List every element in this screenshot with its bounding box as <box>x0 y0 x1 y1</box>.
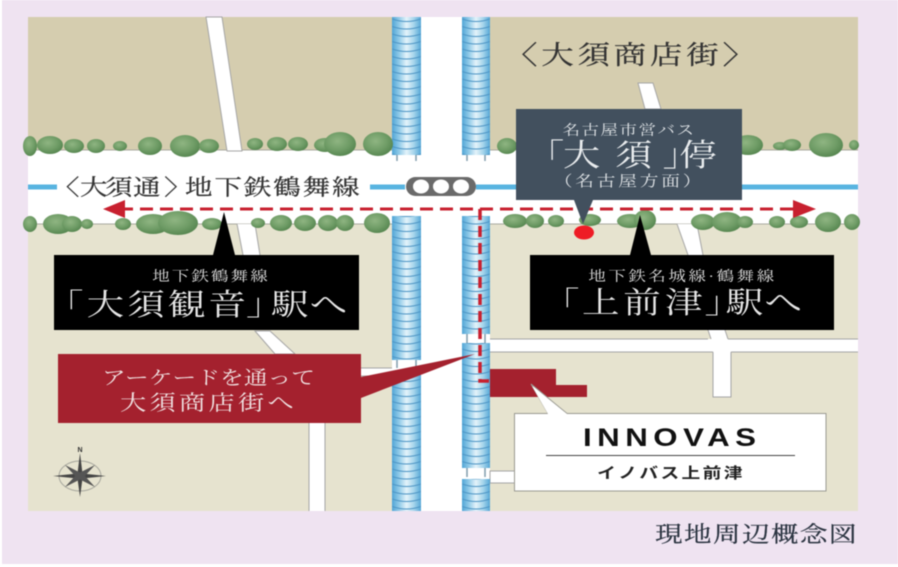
caption: 現地周辺概念図 <box>655 523 858 547</box>
walking route <box>103 200 816 381</box>
label: INNOVAS <box>514 384 826 491</box>
callout: arcade route <box>58 354 475 423</box>
label: Kamimaezu station <box>530 215 834 330</box>
property name: イノバス上前津 <box>597 465 745 482</box>
side streets <box>206 17 858 511</box>
street trees <box>23 132 860 235</box>
direction: （名古屋方面） <box>554 173 704 190</box>
bus stop name: 「大須」停 <box>527 139 717 173</box>
station symbol <box>406 177 476 196</box>
subway line <box>28 184 858 190</box>
bus operator: 名古屋市営バス <box>563 123 695 139</box>
bus stop marker <box>574 226 594 240</box>
logo: INNOVAS <box>583 423 761 451</box>
property building <box>490 369 587 397</box>
line names: 地下鉄名城線·鶴舞線 <box>588 268 777 285</box>
label: Osu Kannon station <box>46 212 359 330</box>
icon: compass: N <box>77 447 83 454</box>
elevated tubes <box>392 17 490 511</box>
callout line two: 大須商店街へ <box>120 391 297 415</box>
callout line one: アーケードを通って <box>102 367 315 388</box>
station name: 「上前津」駅へ <box>542 286 802 320</box>
line name: 地下鉄鶴舞線 <box>152 268 270 285</box>
shopping street label: 〈大須商店街〉 <box>505 41 759 70</box>
station name: 「大須観音」駅へ <box>46 288 347 322</box>
road label: 〈大須通〉地下鉄鶴舞線 <box>52 176 360 200</box>
panel: bus stop <box>516 109 742 224</box>
icon: compass <box>53 447 106 497</box>
